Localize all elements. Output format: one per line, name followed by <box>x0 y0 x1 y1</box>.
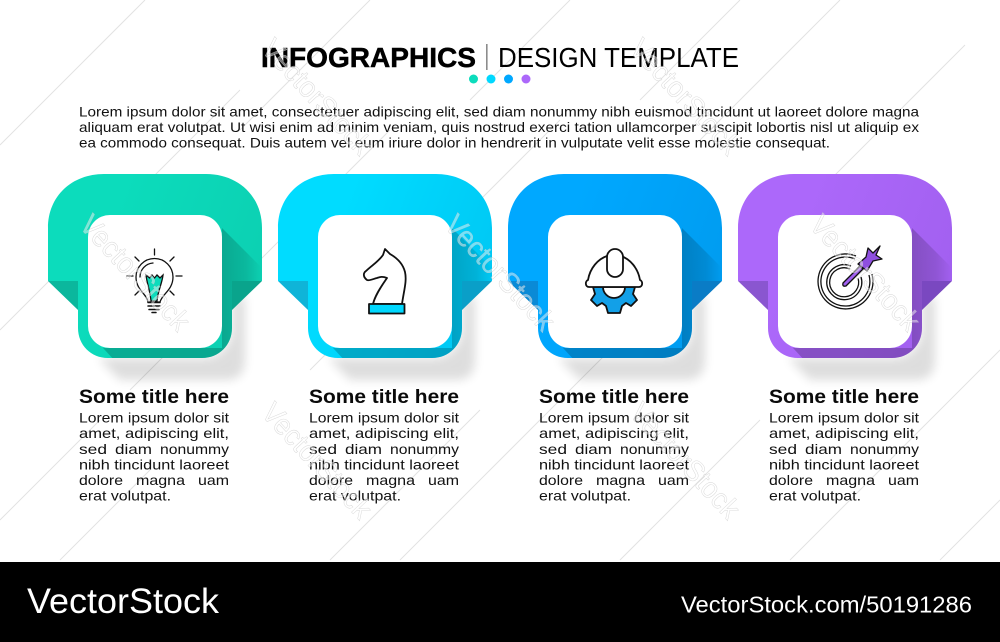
intro paragraph: Lorem ipsum dolor sit amet, consectetuer adipiscing elit, sed diam nonummy nibh euismod tincidunt ut laoreet dolore magna <box>79 104 919 120</box>
watermarks: VectorStock <box>255 33 378 162</box>
panel: step 3 <box>508 174 730 504</box>
watermarks: VectorStock <box>803 209 926 338</box>
step text: nibh tincidunt laoreet <box>539 456 689 472</box>
icon: light bulb <box>127 249 182 312</box>
title: INFOGRAPHICS <box>261 42 476 73</box>
footer logo: VectorStock <box>27 582 220 621</box>
step text: amet, adipiscing elit, <box>79 425 229 441</box>
step text: nibh tincidunt laoreet <box>769 456 919 472</box>
step text: nonummy <box>390 441 459 457</box>
title <box>261 42 739 73</box>
title: DESIGN TEMPLATE <box>498 42 739 73</box>
step text: dolore <box>309 472 353 488</box>
step text: Lorem ipsum dolor sit <box>769 410 919 426</box>
step text: uam <box>888 472 919 488</box>
step text: dolore <box>769 472 813 488</box>
step text: amet, adipiscing elit, <box>769 425 919 441</box>
step text: sed <box>309 441 337 457</box>
step text: diam <box>115 441 152 457</box>
step text: Lorem ipsum dolor sit <box>309 410 459 426</box>
watermarks: VectorStock <box>623 33 746 162</box>
step text: diam <box>575 441 612 457</box>
intro paragraph: ea commodo consequat. Duis autem vel eum iriure dolor in hendrerit in vulputate velit esse molestie consequat. <box>79 134 830 150</box>
panel: step 2 <box>278 174 500 504</box>
step text: uam <box>198 472 229 488</box>
step text: magna <box>596 472 645 488</box>
intro paragraph: aliquam erat volutpat. Ut wisi enim ad minim veniam, quis nostrud exerci tation ullamcorper suscipit lobortis nisl ut aliquip ex <box>79 119 919 135</box>
step text: magna <box>136 472 185 488</box>
step text: erat volutpat. <box>309 488 401 504</box>
panel: step 4 <box>738 174 960 504</box>
watermarks: VectorStock <box>623 397 746 526</box>
step text: uam <box>658 472 689 488</box>
panel: step 1 <box>48 174 270 504</box>
step text: diam <box>345 441 382 457</box>
step title: Some title here <box>79 387 229 408</box>
step text: sed <box>539 441 567 457</box>
step text: Lorem ipsum dolor sit <box>539 410 689 426</box>
watermarks <box>73 33 926 526</box>
step title: Some title here <box>539 387 689 408</box>
step text: nonummy <box>620 441 689 457</box>
step text: uam <box>428 472 459 488</box>
watermarks: VectorStock <box>73 209 196 338</box>
step text: amet, adipiscing elit, <box>309 425 459 441</box>
watermarks: VectorStock <box>255 397 378 526</box>
step text: magna <box>826 472 875 488</box>
step text: sed <box>79 441 107 457</box>
step text: nonummy <box>850 441 919 457</box>
step text: Lorem ipsum dolor sit <box>79 410 229 426</box>
step text: sed <box>769 441 797 457</box>
footer image id: VectorStock.com/50191286 <box>681 592 972 618</box>
step text: dolore <box>79 472 123 488</box>
step text <box>539 410 689 504</box>
step title: Some title here <box>309 387 459 408</box>
step text <box>79 410 229 504</box>
step title: Some title here <box>769 387 919 408</box>
step text: nibh tincidunt laoreet <box>309 456 459 472</box>
step text: diam <box>805 441 842 457</box>
intro paragraph <box>79 104 919 150</box>
step text: nonummy <box>160 441 229 457</box>
step text: erat volutpat. <box>79 488 171 504</box>
step text: erat volutpat. <box>539 488 631 504</box>
step text: dolore <box>539 472 583 488</box>
icon: target with arrow <box>818 246 882 309</box>
step text: erat volutpat. <box>769 488 861 504</box>
watermarks: VectorStock <box>438 209 561 338</box>
icon: chess knight <box>364 249 406 314</box>
icon: helmet with gear <box>586 249 642 313</box>
step text <box>769 410 919 504</box>
title dots <box>469 74 530 84</box>
step text: amet, adipiscing elit, <box>539 425 689 441</box>
footer bar <box>0 562 1000 642</box>
step text <box>309 410 459 504</box>
step text: nibh tincidunt laoreet <box>79 456 229 472</box>
step text: magna <box>366 472 415 488</box>
